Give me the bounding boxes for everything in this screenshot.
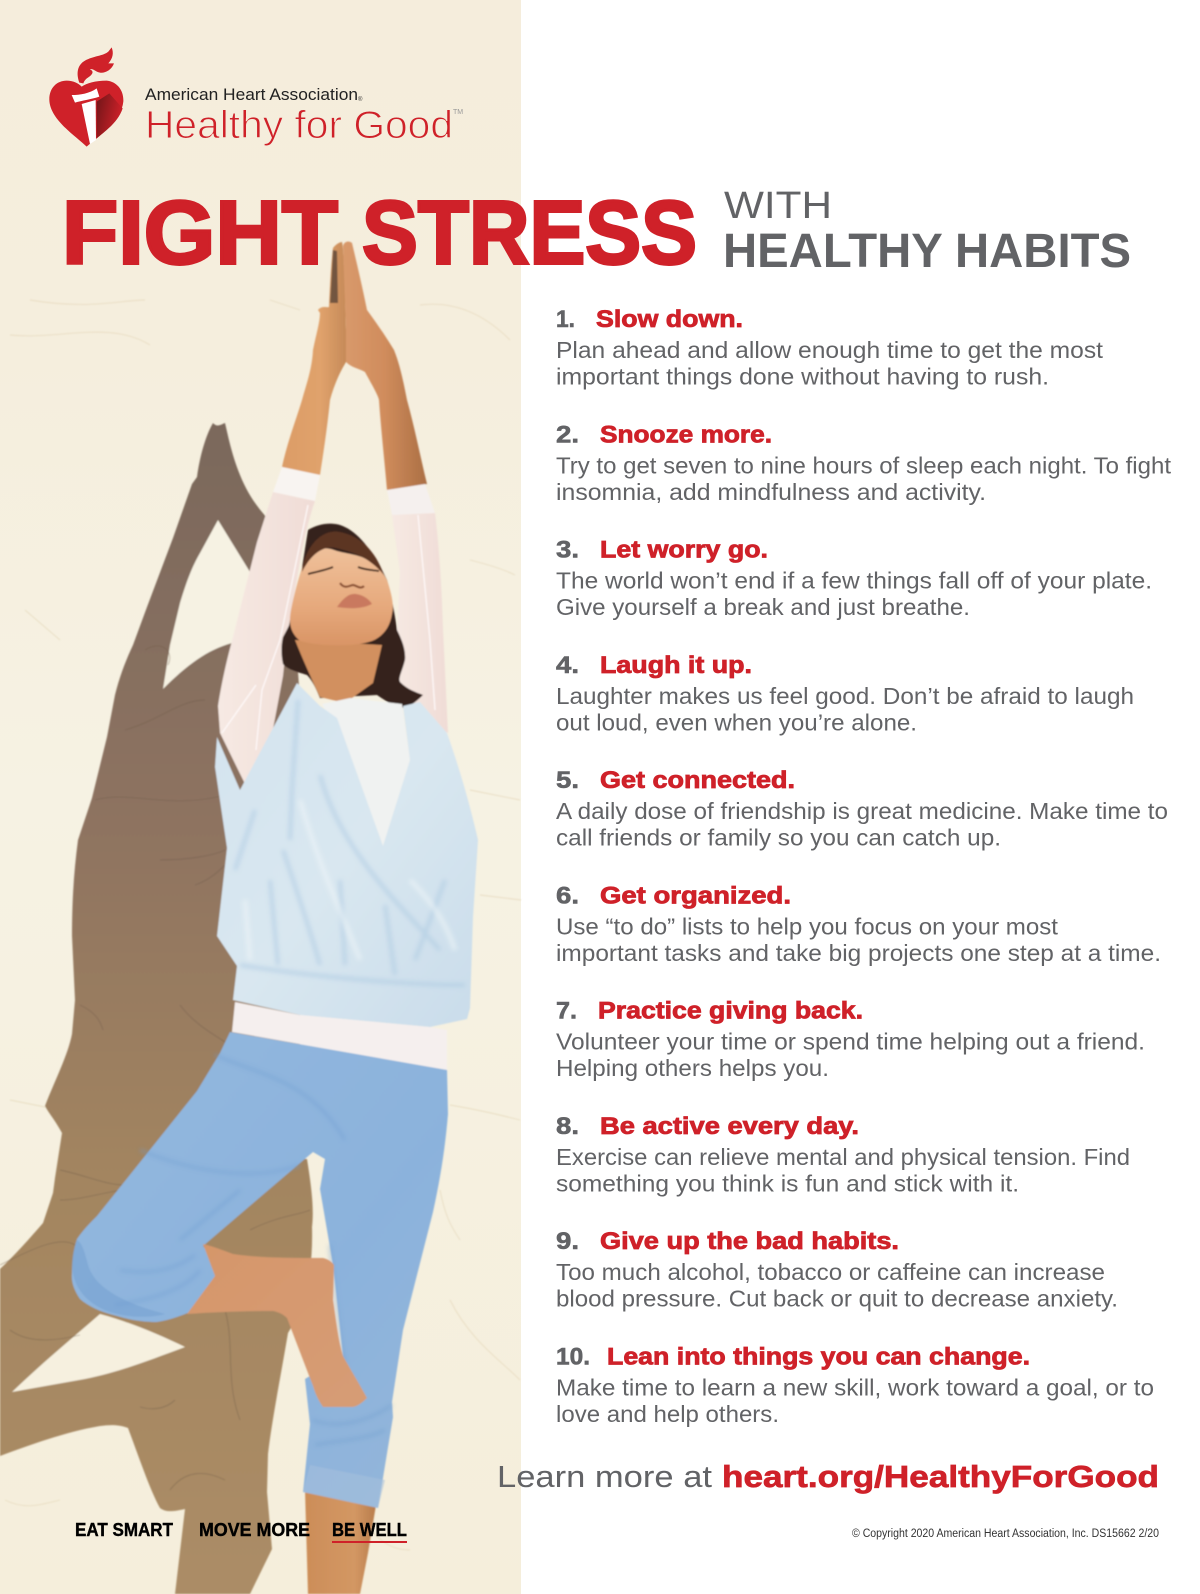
shadow texture lines [0, 646, 310, 1490]
tip 3 [556, 536, 1152, 620]
tip 10: 10. [556, 1343, 590, 1370]
tip 4 [556, 652, 1134, 735]
standing lower leg [305, 1490, 376, 1594]
logo line: Healthy for Good: Healthy for Good [145, 104, 453, 147]
tip 1: Plan ahead and allow enough time to get the most [556, 337, 1104, 363]
call to action: learn more: heart.org/HealthyForGood [722, 1459, 1159, 1494]
left cuff [273, 467, 320, 501]
tip 5: Get connected. [600, 767, 795, 794]
call to action: learn more [497, 1459, 1159, 1494]
tip 10: love and help others. [556, 1401, 779, 1427]
logo: American Heart Association Healthy for Good [49, 47, 463, 147]
tip 7: Practice giving back. [598, 998, 863, 1024]
footer nav: Eat Smart, Move More, Be Well: MOVE MORE [199, 1519, 310, 1540]
tip 3: Let worry go. [600, 536, 768, 564]
tip 6: important tasks and take big projects one step at a time. [556, 940, 1161, 966]
blouse highlights [245, 800, 455, 960]
tip 7 [556, 998, 1145, 1081]
tip 7: 7. [556, 998, 577, 1024]
tip 6: 6. [556, 882, 579, 909]
wall panel background [0, 0, 521, 1594]
subtitle: HEALTHY HABITS: HEALTHY HABITS [723, 225, 1131, 278]
tip 9: Give up the bad habits. [600, 1228, 899, 1255]
body shadow on wall [0, 423, 313, 1594]
tip 7: Helping others helps you. [556, 1055, 829, 1081]
tip 8: Be active every day. [600, 1113, 859, 1140]
tip 8: 8. [556, 1113, 579, 1140]
tip 9: Too much alcohol, tobacco or caffeine can increase [556, 1259, 1105, 1285]
icon: heart and torch [49, 47, 123, 147]
hair back [282, 524, 423, 708]
waistband [232, 1002, 447, 1070]
wall gap between shadow arms [163, 520, 250, 689]
tip 8: Exercise can relieve mental and physical tension. Find [556, 1144, 1130, 1170]
finger shading [330, 250, 338, 303]
logo line: American Heart Association: American Heart Association [145, 85, 358, 104]
lips [337, 594, 372, 608]
tip 8: something you think is fun and stick with it. [556, 1170, 1019, 1196]
footer nav: Eat Smart, Move More, Be Well [75, 1519, 407, 1543]
fringe [302, 532, 384, 575]
registered mark: ® [358, 96, 363, 103]
tip 3: 3. [556, 536, 579, 564]
pants hem highlight [303, 1465, 385, 1508]
copyright: © Copyright 2020 American Heart Association, Inc. DS15662 2/20 [852, 1528, 1159, 1540]
wall patch inside leg shadow [12, 1314, 185, 1392]
tip 5: call friends or family so you can catch up. [556, 824, 1001, 850]
knee shading [72, 1240, 165, 1317]
tip 2: Snooze more. [600, 421, 772, 448]
trademark: TM [453, 109, 463, 116]
title: FIGHT STRESS: FIGHT [62, 184, 338, 284]
right sleeve [392, 513, 448, 733]
call to action: learn more: Learn more at [497, 1459, 712, 1494]
tip 3: The world won’t end if a few things fall off of your plate. [556, 568, 1152, 594]
blouse [215, 683, 478, 1027]
tip 2: insomnia, add mindfulness and activity. [556, 479, 986, 505]
tip 5: A daily dose of friendship is great medicine. Make time to [556, 798, 1168, 824]
right cuff [387, 484, 435, 515]
tip 4: out loud, even when you’re alone. [556, 709, 917, 735]
photo: woman in tree pose against a wall [0, 242, 521, 1594]
tip 1: important things done without having to rush. [556, 364, 1049, 390]
tip 6 [556, 882, 1161, 966]
right raised arm and hand [343, 242, 427, 490]
face [290, 548, 393, 646]
t-shirt [322, 698, 410, 846]
tip 6: Use “to do” lists to help you focus on your most [556, 913, 1059, 939]
closed eyes [308, 567, 379, 574]
tip 4: Laugh it up. [600, 652, 752, 679]
tip 5: 5. [556, 767, 579, 794]
title: FIGHT STRESS: STRESS [362, 184, 697, 284]
tip 10: Lean into things you can change. [607, 1343, 1030, 1370]
title: FIGHT STRESS [62, 184, 697, 284]
tip 9: blood pressure. Cut back or quit to decrease anxiety. [556, 1286, 1118, 1312]
neck [295, 640, 382, 703]
left sleeve [218, 492, 315, 790]
wall plaster cracks [5, 300, 521, 1550]
tip 10 [556, 1343, 1154, 1427]
tip 8 [556, 1113, 1130, 1196]
footer nav: Eat Smart, Move More, Be Well: BE WELL [332, 1519, 407, 1540]
tip 5 [556, 767, 1168, 850]
tip 1 [556, 306, 1104, 390]
footer nav: Eat Smart, Move More, Be Well: EAT SMART [75, 1519, 174, 1540]
tip 1: 1. [556, 306, 575, 333]
pants [72, 1032, 448, 1508]
tip 2: 2. [556, 421, 579, 448]
tip 4: Laughter makes us feel good. Don’t be afraid to laugh [556, 683, 1134, 709]
pants folds [115, 1055, 392, 1445]
tip 2: Try to get seven to nine hours of sleep each night. To fight [556, 452, 1172, 478]
sleeve seams [222, 505, 435, 750]
blouse folds [235, 700, 465, 985]
tip 9: 9. [556, 1228, 579, 1255]
tip 1: Slow down. [596, 306, 743, 333]
tip 10: Make time to learn a new skill, work toward a goal, or to [556, 1374, 1154, 1400]
tip 7: Volunteer your time or spend time helping out a friend. [556, 1028, 1145, 1054]
tip 4: 4. [556, 652, 579, 679]
tip 3: Give yourself a break and just breathe. [556, 594, 970, 620]
nose [340, 583, 364, 588]
tip 2 [556, 421, 1172, 505]
tip 9 [556, 1228, 1118, 1312]
left raised arm and hand [282, 242, 346, 475]
tip 6: Get organized. [600, 882, 791, 909]
raised foot [187, 1244, 367, 1407]
subtitle: WITH: WITH [724, 185, 832, 227]
